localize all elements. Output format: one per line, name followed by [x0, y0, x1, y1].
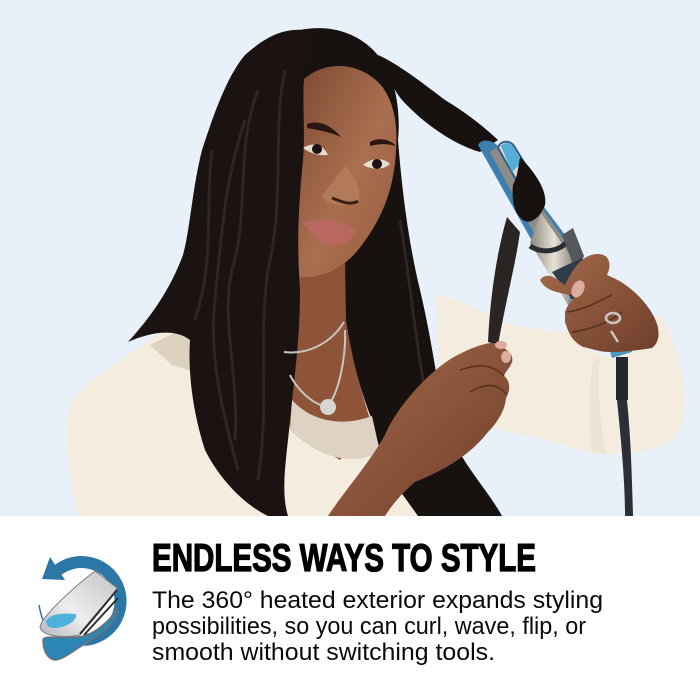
upper arm — [498, 142, 538, 192]
photo: woman styling hair — [67, 28, 685, 516]
body text: possibilities, so you can curl, wave, flip, or — [152, 613, 586, 640]
icon: 360 rotating iron — [39, 557, 121, 660]
knuckle lines — [567, 295, 622, 332]
necklaces — [284, 322, 345, 406]
brows — [307, 123, 396, 146]
lower plate — [478, 141, 590, 305]
neck and chest — [285, 262, 372, 460]
clamp ring — [530, 232, 572, 251]
body text: The 360° heated exterior expands styling — [152, 587, 603, 614]
iron plate edge — [80, 590, 118, 635]
flat iron — [478, 141, 632, 358]
fingernails — [495, 341, 511, 363]
sweater arm — [436, 295, 685, 455]
iron lower plate — [43, 608, 118, 660]
photo background — [0, 0, 700, 516]
hair section to iron — [378, 55, 498, 152]
lace shoulder — [150, 325, 195, 372]
body text — [152, 587, 603, 666]
hair highlights — [195, 70, 430, 480]
blue heat pad — [46, 614, 76, 628]
rotation arrow — [39, 557, 121, 640]
pendant — [320, 399, 336, 415]
sweater body — [67, 300, 440, 516]
inner grey plate — [490, 146, 580, 292]
hair wrapped around iron — [513, 157, 545, 222]
rings — [454, 313, 620, 414]
thumb nail — [569, 278, 587, 300]
blue collar — [608, 335, 632, 358]
straight hair strand — [488, 217, 520, 345]
nose — [322, 165, 359, 205]
lips — [303, 220, 355, 245]
eyes — [303, 144, 390, 169]
body text: smooth without switching tools. — [152, 639, 495, 666]
face — [293, 66, 396, 277]
sleeve shading — [589, 358, 606, 454]
front hair lock — [128, 30, 308, 516]
heading: ENDLESS WAYS TO STYLE — [152, 537, 536, 580]
iron upper plate — [40, 571, 117, 636]
handle — [562, 228, 584, 272]
cord — [616, 357, 633, 516]
right hand — [540, 254, 659, 352]
blue heat pad — [501, 143, 522, 172]
lace neckline — [290, 400, 380, 459]
finger lines — [460, 366, 506, 394]
left hand — [328, 343, 512, 516]
back hair right side — [300, 28, 502, 516]
silver barrel — [530, 213, 578, 305]
